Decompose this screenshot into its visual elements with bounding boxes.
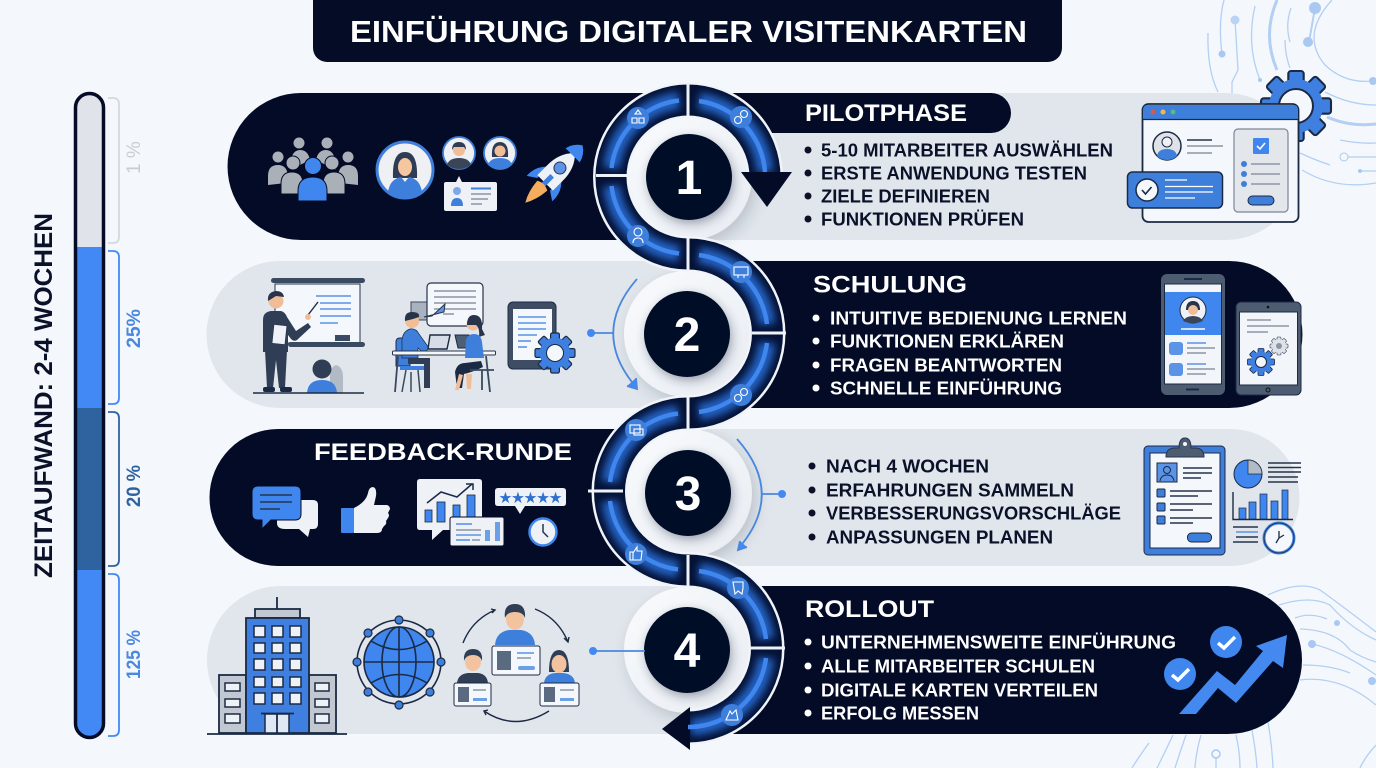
panel: row 2 right dark — [688, 261, 1302, 408]
icon: pie chart — [1234, 460, 1301, 488]
bracket: 25% — [108, 251, 145, 404]
step number 2 — [644, 291, 730, 377]
icon: tablet and gear — [508, 302, 575, 373]
step number 4 — [644, 607, 730, 693]
arrowhead: top of ribbon — [741, 172, 792, 207]
bracket: 20 %: 20 % — [124, 465, 145, 507]
connector arrow: row 2 — [587, 279, 637, 389]
time bar — [30, 94, 145, 738]
text block: rollout — [804, 596, 1176, 724]
icon: five star rating: ★★★★★ — [498, 489, 562, 507]
stacked progress bar — [76, 94, 104, 738]
panel: row 1 right light — [688, 93, 1299, 240]
panel: row 2 left light — [207, 261, 688, 408]
bullet list: feedback-runde: ANPASSUNGEN PLANEN — [826, 528, 1053, 548]
bullet list: feedback-runde: ERFAHRUNGEN SAMMELN — [826, 480, 1074, 500]
panel: row 1 left dark — [228, 93, 688, 240]
time bar heading: ZEITAUFWAND: 2-4 WOCHEN — [30, 213, 58, 578]
step number 4: 4 — [674, 625, 701, 678]
arrowhead: bottom of ribbon — [662, 707, 692, 750]
step number 2: 2 — [674, 309, 700, 362]
icon: notes and stopwatch — [1233, 523, 1294, 553]
icon: globe with network — [353, 616, 445, 709]
icon: chat bubbles — [252, 486, 318, 537]
ribbon icon: presentation — [730, 261, 752, 283]
ribbon icon: document — [727, 577, 749, 599]
icon: office building — [207, 597, 347, 734]
icon: phone with profile — [1161, 274, 1225, 395]
icon: check badges — [1164, 626, 1242, 690]
icon: rising arrow — [1179, 635, 1287, 714]
ribbon icon: thumb — [625, 543, 647, 565]
bullet list: pilotphase — [804, 140, 1113, 230]
connector line: row 4 — [589, 647, 645, 655]
bracket: 125 %: 125 % — [124, 630, 145, 679]
panel: row 4 right dark — [688, 586, 1302, 734]
bullet list: rollout: ERFOLG MESSEN — [821, 704, 979, 724]
panel: row 4 left light — [207, 586, 688, 734]
panel: row 3 right light — [688, 429, 1300, 566]
decorative circuit lines: bottom right — [1132, 586, 1376, 768]
bullet list: schulung: INTUITIVE BEDIENUNG LERNEN — [830, 308, 1127, 328]
step number 3: 3 — [675, 468, 701, 521]
ribbon icon: chat — [625, 419, 647, 441]
bullet list: feedback-runde: NACH 4 WOCHEN — [826, 456, 989, 476]
icon: two people working at table — [392, 283, 496, 392]
panel: row 3 left dark — [209, 429, 688, 566]
icon: chart speech bubble — [417, 479, 504, 546]
title banner: EINFÜHRUNG DIGITALER VISITENKARTEN — [350, 14, 1027, 49]
bullet list: pilotphase: FUNKTIONEN PRÜFEN — [821, 210, 1024, 230]
icon: clipboard checklist — [1144, 438, 1225, 555]
bracket: 25%: 25% — [124, 309, 145, 348]
icon: rocket — [513, 133, 595, 215]
text block: pilotphase — [804, 100, 1113, 230]
icon: five star rating — [495, 488, 566, 514]
icon: contact card — [444, 176, 497, 211]
connector arrow: row 3 — [737, 439, 786, 550]
ribbon icon: gears — [730, 106, 752, 128]
bullet list: rollout: ALLE MITARBEITER SCHULEN — [821, 656, 1095, 676]
ribbon icon: gears — [730, 384, 752, 406]
text block: schulung — [812, 272, 1127, 398]
bracket: 1 % — [108, 98, 145, 243]
ribbon icon: network — [721, 704, 743, 726]
ribbon icon: people — [627, 107, 649, 129]
icon: team group — [268, 138, 358, 201]
step number 1: 1 — [676, 152, 702, 205]
step number 1 — [646, 134, 732, 220]
bullet list: rollout — [804, 632, 1176, 724]
heading: rollout: ROLLOUT — [805, 596, 934, 623]
title banner — [313, 0, 1062, 62]
bullet list: feedback-runde: VERBESSERUNGSVORSCHLÄGE — [826, 504, 1121, 524]
bracket: 125 % — [108, 574, 145, 736]
bracket: 1 %: 1 % — [124, 141, 145, 174]
icon: woman avatar — [377, 142, 433, 198]
bullet list: pilotphase: ERSTE ANWENDUNG TESTEN — [821, 164, 1087, 184]
icon: man avatar — [443, 137, 475, 169]
heading: feedback-runde: FEEDBACK-RUNDE — [314, 439, 572, 466]
bullet list: schulung: SCHNELLE EINFÜHRUNG — [830, 378, 1062, 398]
pilotphase heading tab — [688, 93, 1011, 133]
bullet list: schulung — [812, 308, 1127, 398]
icon: tablet with gears — [1236, 302, 1301, 395]
icon: presenter at whiteboard — [253, 278, 365, 393]
icon: employees exchanging cards — [454, 604, 579, 722]
bullet list: feedback-runde — [808, 456, 1121, 548]
heading: schulung: SCHULUNG — [813, 272, 967, 298]
bullet list: schulung: FUNKTIONEN ERKLÄREN — [830, 332, 1064, 352]
bullet list: rollout: DIGITALE KARTEN VERTEILEN — [821, 680, 1098, 700]
bullet list: schulung: FRAGEN BEANTWORTEN — [830, 356, 1062, 376]
icon: clock — [530, 518, 556, 546]
icon: thumbs up — [341, 487, 390, 533]
bullet list: pilotphase: ZIELE DEFINIEREN — [821, 186, 990, 206]
step number 3 — [645, 450, 731, 536]
s-shaped ribbon — [588, 83, 786, 727]
icon: browser window with profile — [1128, 104, 1298, 222]
ribbon icon: support — [627, 225, 649, 247]
white rings behind the numbers — [624, 114, 752, 713]
bracket: 20 % — [108, 412, 145, 566]
icon: woman small avatar — [484, 137, 516, 169]
icon: bar chart — [1233, 490, 1293, 520]
decorative circuit lines: top right — [1208, 0, 1376, 185]
bullet list: rollout: UNTERNEHMENSWEITE EINFÜHRUNG — [821, 632, 1176, 652]
icon: gear behind browser window — [1261, 71, 1331, 141]
bullet list: pilotphase: 5-10 MITARBEITER AUSWÄHLEN — [821, 140, 1113, 160]
heading: pilotphase: PILOTPHASE — [805, 100, 967, 127]
